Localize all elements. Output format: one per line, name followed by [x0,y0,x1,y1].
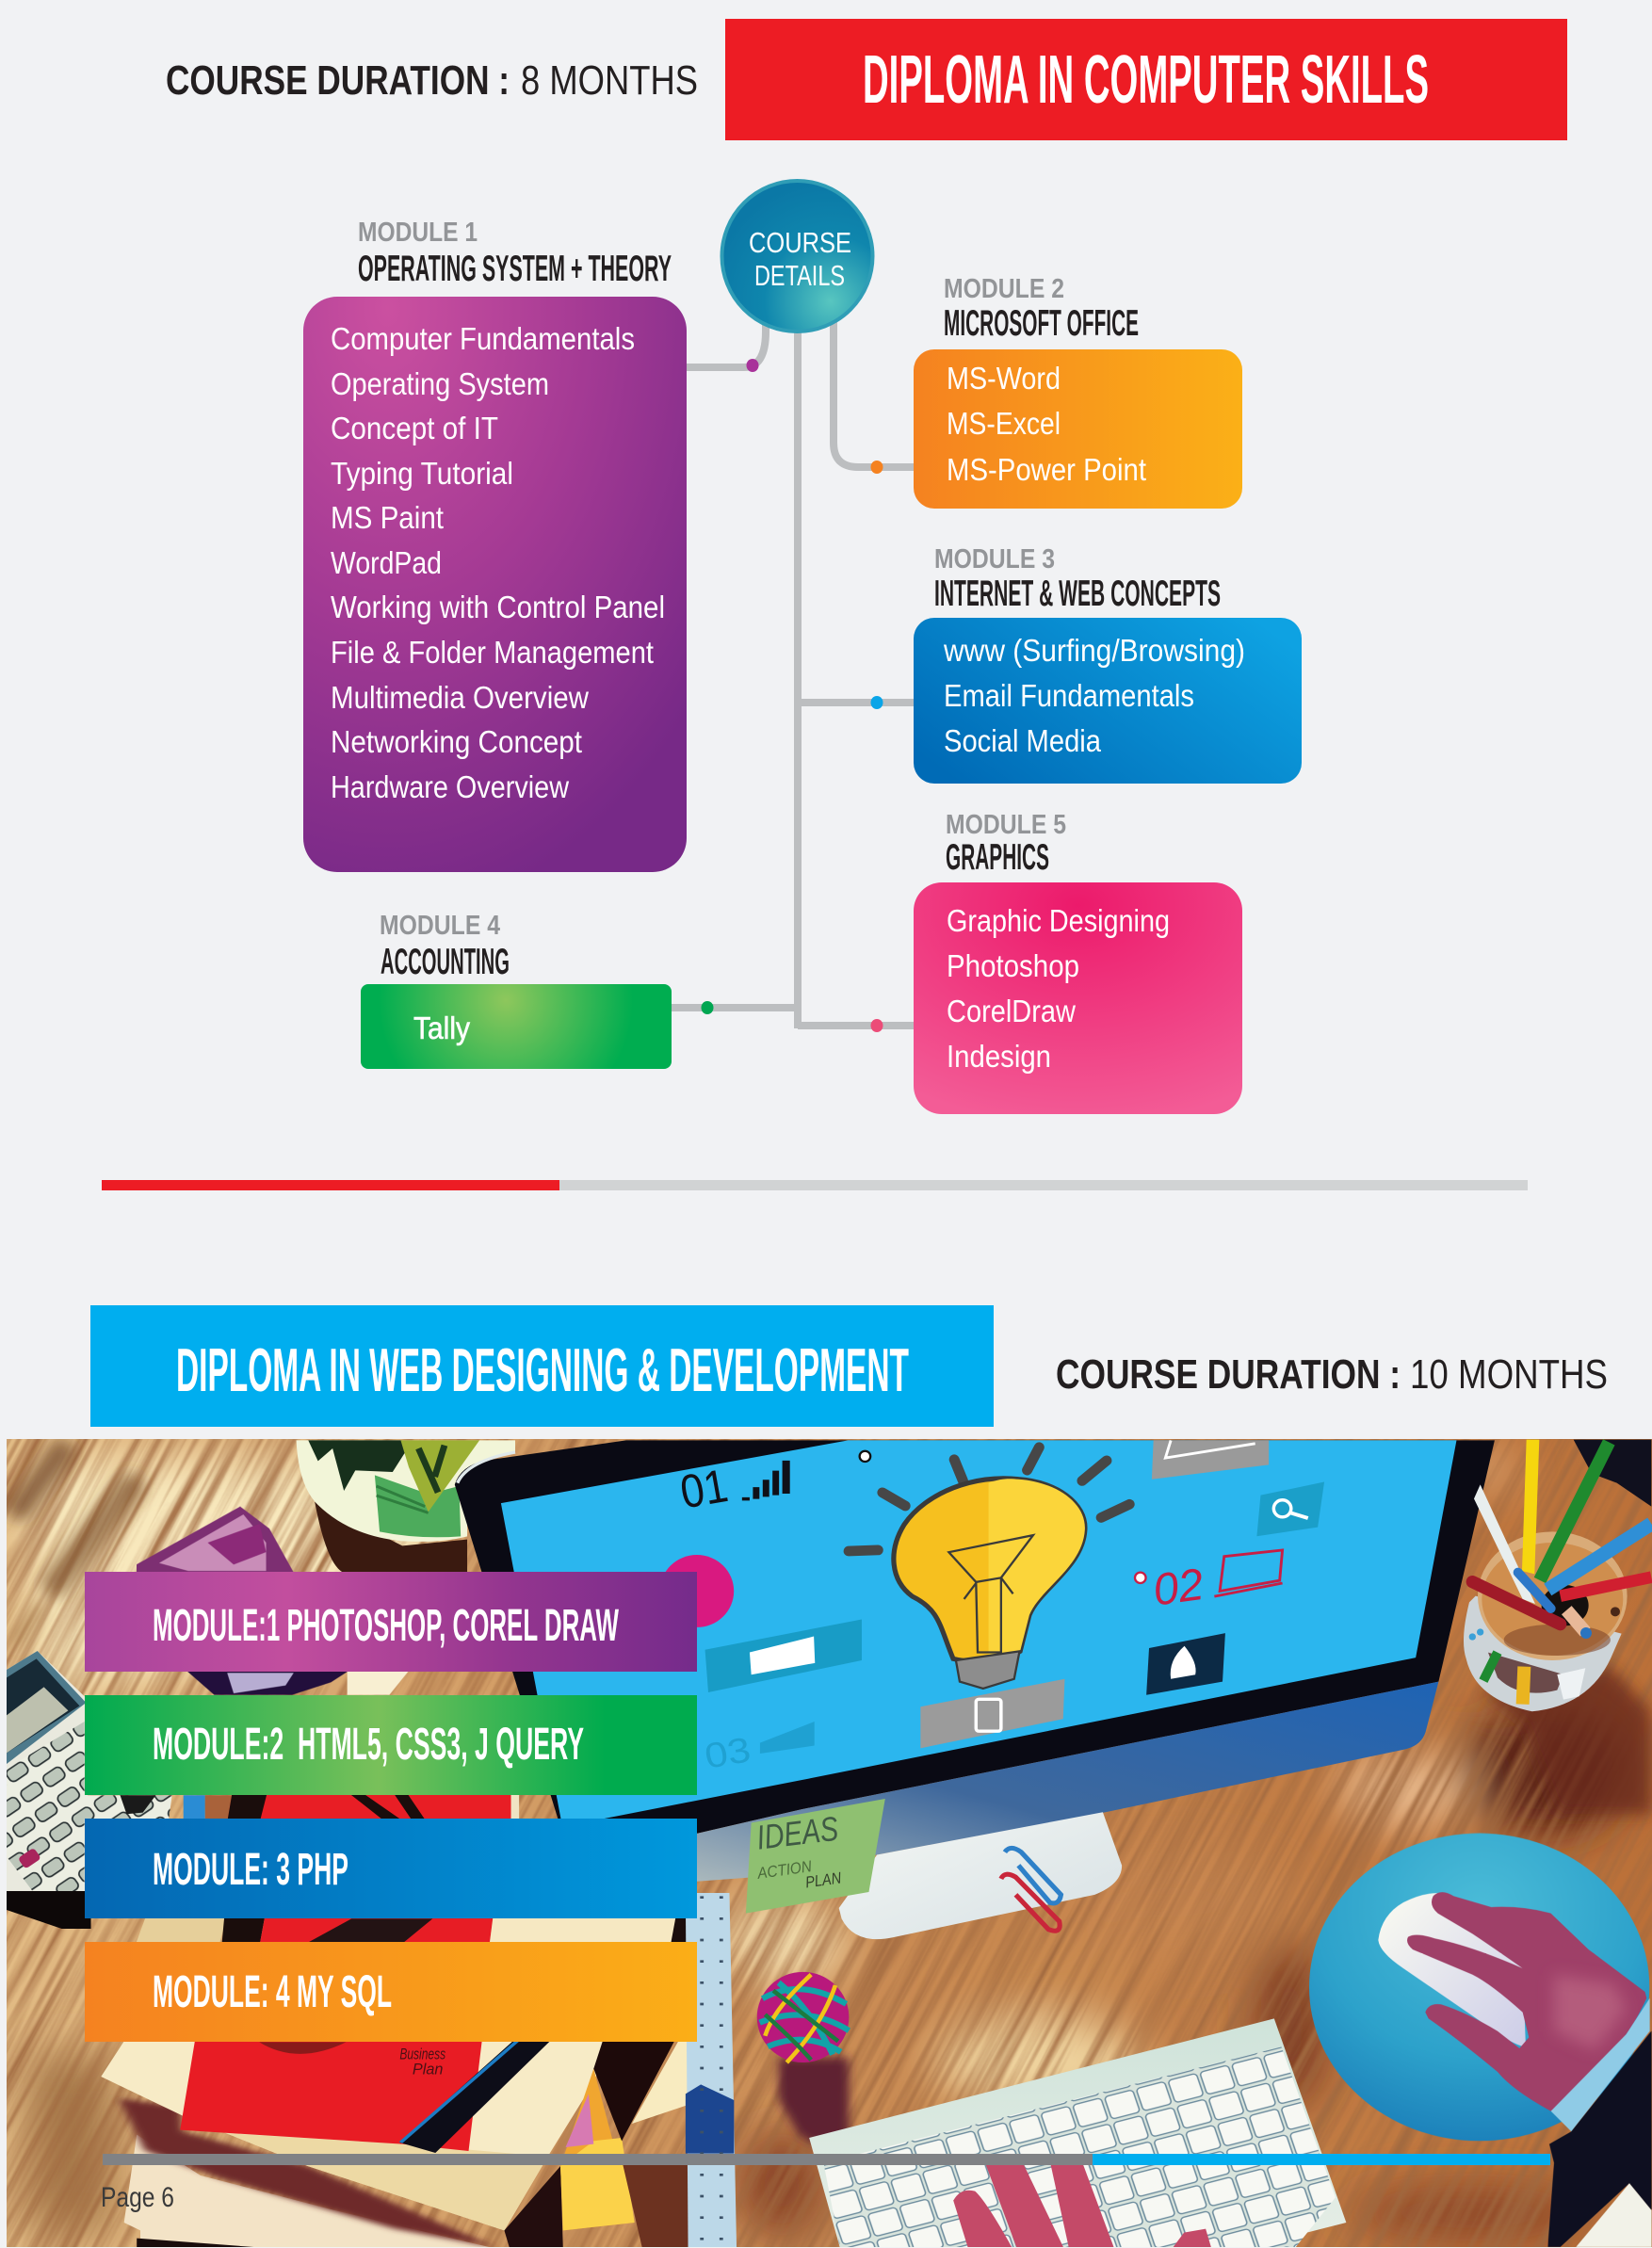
panel: module 1: Typing Tutorial [331,456,513,491]
red label 02: 02 [1150,1560,1207,1616]
rocket icon box [1146,1633,1225,1695]
mouse [1378,1893,1526,2046]
panel: module 5: Indesign [947,1039,1051,1074]
red label 02 [1135,1550,1283,1616]
monitor chin [697,1682,1438,1882]
panel: module 3 [914,618,1302,784]
title banner: diploma in web designing [90,1305,994,1427]
keyboard [809,2018,1346,2247]
jacket sleeve [1547,2031,1651,2247]
module 3 heading [934,544,1221,614]
module 5 heading [946,810,1066,878]
progress divider [102,1180,1528,1190]
signal label 01 [676,1459,790,1519]
plant [297,1440,515,1574]
panel: module 1 [303,297,687,872]
mouse pad [1309,1834,1649,2141]
module bar 4 [85,1942,697,2042]
panel: module 1: Concept of IT [331,411,498,445]
module bar 3: MODULE: 3 PHP [153,1845,348,1895]
wood streaks [16,1451,130,1640]
panel: module 3: www (Surfing/Browsing) [943,633,1245,668]
module 4 heading: ACCOUNTING [381,942,510,982]
small white dots [860,1451,870,1462]
page number: Page 6 [101,2182,174,2213]
module 4 heading: MODULE 4 [380,911,500,941]
heading: course duration 10 months: 10 MONTHS [1410,1351,1608,1398]
panel: module 1: Computer Fundamentals [331,321,635,356]
calculator [7,1651,237,1929]
module 1 heading [358,218,672,289]
monitor screen [501,1440,1456,1819]
tablet icon box [920,1679,1064,1748]
bulb rays [849,1447,1129,1551]
shirt cuff [1551,1998,1650,2131]
red notebook between bars [136,1791,700,1946]
panel: module 4: Tally [413,1011,470,1045]
grey speech box [1152,1440,1269,1480]
yarn ball [757,1972,849,2159]
mail icon [705,1619,862,1692]
course details circle: DETAILS [754,259,845,292]
knuckle highlight [1554,1975,1627,2050]
panel: module 1: Hardware Overview [331,769,569,804]
sticky note: ACTION [755,1856,813,1883]
stacked books and notebook [101,2037,688,2248]
module 2 heading [944,274,1139,344]
sticky note: IDEAS [754,1809,840,1857]
panel: module 5: Photoshop [947,948,1079,983]
panel: module 1: File & Folder Management [331,635,654,670]
panel: module 1: MS Paint [331,500,444,535]
panel: module 2 [914,349,1242,509]
module bar 2: MODULE:2 HTML5, CSS3, J QUERY [153,1720,584,1770]
connector dots [701,359,883,1032]
bottom progress bar [103,2154,1550,2165]
panel: module 2: MS-Excel [947,406,1061,441]
photo: desk with monitor [7,1439,1652,2248]
panel: module 4 [361,984,672,1069]
sticky note [746,1799,885,1914]
heading: course duration 8 months: 8 MONTHS [521,57,698,104]
course details circle: COURSE [749,226,851,259]
wood tone patches [28,1447,1629,2241]
module 2 heading: MODULE 2 [944,274,1064,304]
panel: module 1: Working with Control Panel [331,590,665,624]
panel: module 5: CorelDraw [947,994,1076,1028]
wood grain [7,1439,1652,2247]
panel: module 2: MS-Word [947,361,1061,396]
hand [1407,1892,1646,2111]
sticky note: PLAN [804,1868,843,1891]
module 1 heading: MODULE 1 [358,218,478,248]
title banner: diploma in computer skills [725,19,1567,140]
module bar 1: MODULE:1 PHOTOSHOP, COREL DRAW [153,1601,619,1651]
monitor stand [839,1812,1122,1939]
module 3 heading: INTERNET & WEB CONCEPTS [934,574,1221,614]
top-left bezel corner highlight [458,1452,515,1483]
course details circle [721,181,872,332]
panel: module 5 [914,882,1242,1114]
module bar 1 [85,1572,697,1672]
white paper [1576,2183,1651,2247]
module bar 4: MODULE: 4 MY SQL [153,1967,392,2017]
stacked books and notebook: Plan [413,2061,443,2078]
panel: module 3: Email Fundamentals [944,678,1194,713]
faint label 03: 03 [702,1729,753,1776]
signal label 01: 01 [676,1459,732,1519]
module bar 3 [85,1819,697,1918]
panel: module 2: MS-Power Point [947,452,1146,487]
top right dark corner [1574,1440,1651,1507]
jar shadow [1482,1667,1651,1814]
module bar 2 [85,1695,697,1795]
mouse pad with hand [1309,1834,1651,2247]
title banner: diploma in web designing: DIPLOMA IN WEB DESIGNING & DEVELOPMENT [176,1335,909,1404]
panel: module 1: Multimedia Overview [331,680,589,715]
ruler [686,1893,737,2248]
panel: module 1: Operating System [331,366,549,401]
stacked books and notebook: Business [399,2046,445,2062]
heading: course duration 10 months: COURSE DURATION : [1056,1351,1401,1398]
connector lines [671,320,914,1028]
pink circle icon [660,1555,734,1627]
module 3 heading: MODULE 3 [934,544,1055,574]
panel: module 5: Graphic Designing [947,903,1170,938]
light bulb [894,1479,1085,1689]
faint label 03 [702,1722,815,1776]
pencil holder [1464,1440,1651,1711]
paper clips [1001,1848,1061,1931]
panel: module 1: Networking Concept [331,724,582,759]
module 4 heading [380,911,510,982]
module 5 heading: GRAPHICS [946,837,1049,878]
module 2 heading: MICROSOFT OFFICE [944,303,1139,344]
module 5 heading: MODULE 5 [946,810,1066,840]
panel: module 1: WordPad [331,545,442,580]
panel: module 3: Social Media [944,723,1102,758]
heading: course duration 8 months: COURSE DURATION : [166,57,510,104]
typing fingers [953,2164,1211,2247]
search icon box [1256,1482,1324,1536]
purple wallet [137,1507,409,1695]
module 1 heading: OPERATING SYSTEM + THEORY [358,249,672,289]
monitor bezel [455,1440,1495,1834]
